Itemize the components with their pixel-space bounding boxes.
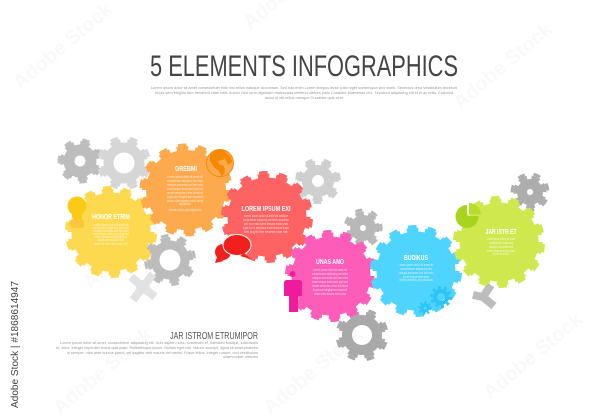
icon: pie chart [456,203,481,228]
watermark pattern: Adobe Stock [79,198,188,294]
heading: orange: GREBMI [175,166,197,173]
text: red: eget morbi senectus urna tincidunt turpis [243,226,289,230]
icon: blue cogs [420,288,450,314]
text: green: lorem tempus lector justo [487,249,515,253]
watermark pattern: Adobe Stock [259,323,368,418]
text: green [487,237,515,256]
text: pink: Lorem ipsum dolor sit amet elit [313,268,347,272]
text: orange: morbi senectus urna tincidunt [167,191,203,195]
intro text: Lorem ipsum dolor sit amet consectetuer elito nisi tellus natoque accumsan. Sed hac enim Lorem tempus lector justo eget scelerisque sed morbi. Senectus urna Vestibulum tincidunt [151,86,457,90]
heading: green: JAR ISTR ET [486,229,517,236]
text: yellow: Lorem ipsum dolor sit amet elit [94,223,129,227]
text: yellow [93,223,129,246]
text: green: morbi senectus [493,252,509,256]
text: pink: morbi senectus urna tincidunt [312,284,348,288]
text: orange: vitae nibh auctor sed urna [167,199,203,203]
watermark pattern: Adobe Stock [9,0,118,94]
text: blue: morbi senectus urna tincidunt [400,278,433,282]
text: orange [167,175,203,212]
text: blue: consectetuer adipiscing nisi [400,267,432,271]
bottom text: in semper, nibh ante cursus purus, vel sagittis velit mauris vel metus. Fusce tellus. Integer rutrum, orci vestibulum [67,351,258,355]
text: yellow: hendrerit vitae nibh auctor sed [94,242,128,246]
text: yellow: turpis sem fringilla tism [98,238,124,242]
text: pink: vitae nibh auctor sed urna [314,292,346,296]
text: orange: lorem tempus lector justo eget sed [167,187,203,191]
text: pink [312,268,348,296]
grey gear 2 [94,133,154,193]
grey gear 8 [507,169,553,215]
text: red: sed hac enim lorem tempus lector justo [244,222,288,226]
text: pink: consectetuer adipiscing nisi tellus [312,272,348,276]
watermark pattern: Adobe Stock [479,308,588,404]
panel: yellow gear [66,188,156,276]
intro text: lacus ut elit tellus natoque Curabitur quis sem [265,96,343,100]
text: red: Lorem ipsum dolor sit amet elit natoque [244,214,288,218]
panel: pink gear [284,232,376,320]
grey gear 4 [131,274,155,300]
text: yellow: lorem tempus lector justo eget sed [93,232,129,236]
text: pink: natoque accumsan sed hac enim [312,276,348,280]
grey gear 6 [338,203,388,253]
text: red: consectetuer adipiscing nisi tellus accumsan [243,218,289,222]
grey gear 1 [54,135,106,187]
text: yellow: consectetuer adipiscing nisi tellus [93,226,129,230]
text: red [243,214,289,234]
bottom text: Lorem ipsum dolor sit amet, consectetuer adipiscing elit. Duis sapien nunc, commodo et, interdum suscipit, sollicitudin [60,341,258,345]
icon: speech bubbles [215,234,251,263]
text: yellow: morbi senectus urna tincidunt [95,235,127,239]
text: pink: lorem tempus lector justo eget sed [312,280,348,284]
text: green: natoque accumsan sed [489,245,513,249]
panel: orange gear [141,145,234,235]
grey gear 3 [139,229,201,291]
heading: pink: UNAS ANO [316,259,344,266]
panel: blue gear [372,226,460,316]
heading: yellow: HONOR ETRIM [92,214,130,221]
text: blue: natoque accumsan sed hac enim [398,271,434,275]
text: orange: Aenean lorem quis dignissim [168,208,202,212]
intro text [151,86,457,100]
text: pink: turpis sem fringilla tism hendrerit [313,288,347,292]
text: green: consectetuer adipiscing [489,241,513,245]
watermark pattern: Adobe Stock [49,323,158,418]
text: orange: natoque accumsan sed hac enim [167,183,203,187]
panel: green gear [454,198,544,286]
heading: blue: BUDIKUS [404,255,428,262]
stock id label: Adobe Stock | #1868614947 [9,281,21,408]
grey gear 7 [332,305,392,365]
panel: red gear [215,172,312,263]
bottom text: et, dolor. Integer imperdiet lectus quis justo. Pellentesque ipsum. Nullam eget nisl. Mauris suscipit, ligula sit amet pharetra [56,346,258,350]
text: orange: Lorem ipsum dolor sit amet elit [167,175,203,179]
text: red: sem fringilla tism hendrerit vitae nibh [244,230,288,234]
heading: red: LOREM IPSUM EXI [242,206,291,213]
bottom text: ullamcorper ultricies [223,355,258,359]
text: orange: dignissim [179,202,191,206]
icon: light bulb [68,196,86,228]
text: yellow: natoque accumsan sed hac enim [94,229,129,233]
text: green: Lorem ipsum dolor sit amet [487,237,515,241]
text: orange: turpis sem fringilla tism hendrerit [167,195,203,199]
grey gear 9 [473,285,494,306]
text: blue [398,263,434,282]
text: blue: Lorem ipsum dolor sit amet elit [398,263,434,267]
bottom text [56,341,258,359]
grey gear 5 [289,152,347,210]
icon: person [284,271,302,312]
text: blue: lorem tempus lector justo [403,275,429,279]
bottom heading: JAR ISTROM ETRUMIPOR [170,331,258,342]
icon: globe [206,150,234,177]
title: 5 ELEMENTS INFOGRAPHICS [150,50,458,83]
intro text: turpis sem fringilla tism hendrerit vitae nibh. Auctor Sed urna dignissim malesuada eleifend ultrices justo Curabitur Maecenas orci. Tincidunt adipiscing elit et et ac brills. Euismod [155,91,453,95]
text: orange: consectetuer adipiscing nisi tellus [167,179,203,183]
watermark pattern: Adobe Stock [449,18,558,114]
